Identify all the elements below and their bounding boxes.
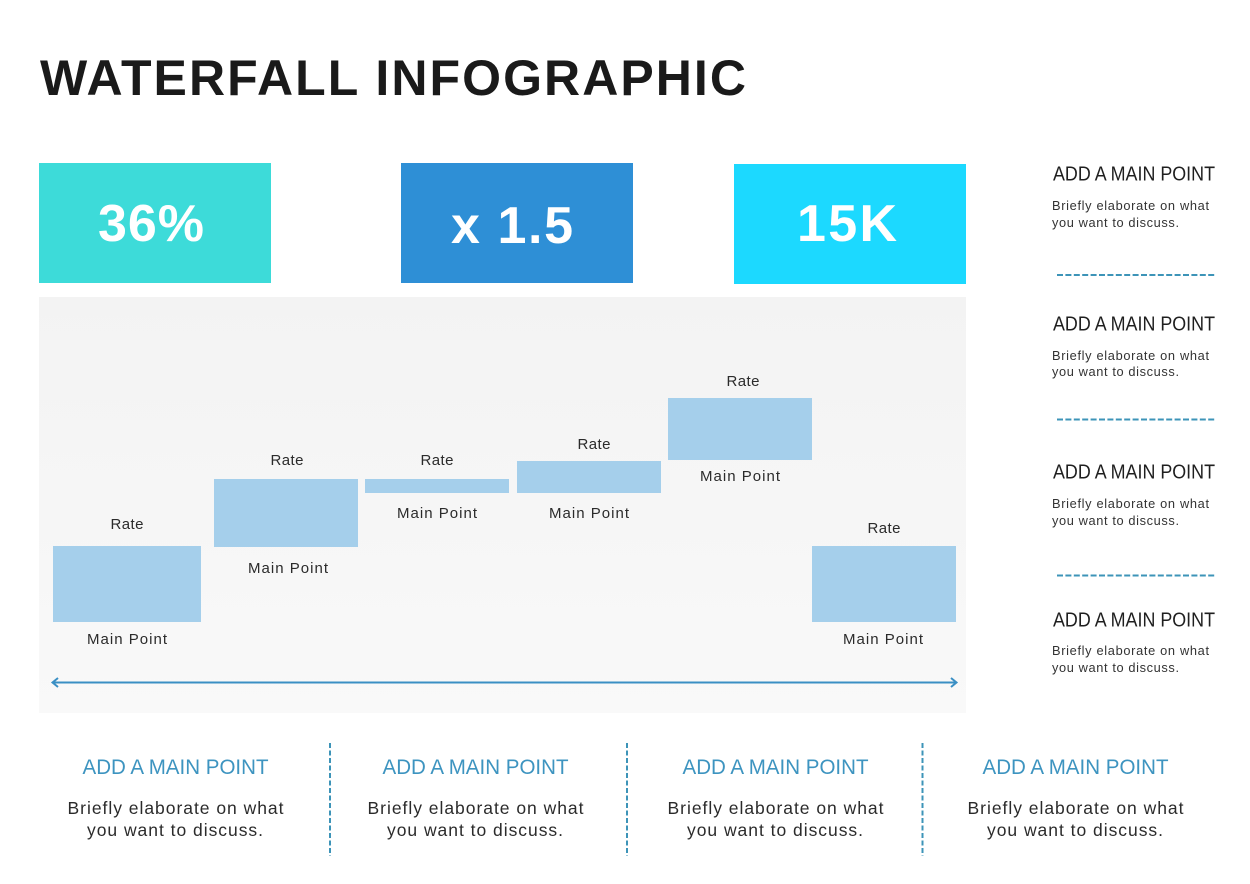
bottom column 4: you want to discuss. [987,820,1163,840]
bar 2: Rate [270,452,304,469]
bar 4: Main Point [549,505,630,522]
bar 1 [53,516,201,648]
bottom column 1: Briefly elaborate on what [68,798,284,818]
panel: waterfall chart [39,297,966,713]
bar 6: Rate [868,520,900,537]
side note 3: ADD A MAIN POINT [1053,462,1215,484]
bar 3: Main Point [397,505,478,522]
side note 4: Briefly elaborate on what [1052,643,1209,658]
bottom column 4: Briefly elaborate on what [968,798,1184,818]
side note 3 [1052,462,1215,528]
bottom column 1: ADD A MAIN POINT [82,756,269,779]
bottom column 3 [668,756,884,840]
side note 1: Briefly elaborate on what [1052,198,1209,213]
side note 2 [1052,314,1215,379]
side note 2: you want to discuss. [1052,364,1179,379]
stat card: x 1.5: x 1.5 [451,197,573,255]
bar 6: Main Point [843,631,924,648]
stat card: 15K [734,164,966,284]
bottom column 3: you want to discuss. [687,820,863,840]
side note 1 [1052,164,1215,230]
bottom column 4 [968,756,1184,840]
bottom column 3: ADD A MAIN POINT [682,756,869,779]
bar 5: Main Point [700,468,781,485]
side note 1: ADD A MAIN POINT [1053,164,1215,186]
side note 3: Briefly elaborate on what [1052,496,1209,511]
bottom column 1: you want to discuss. [87,820,263,840]
bottom column 4: ADD A MAIN POINT [982,756,1169,779]
bar 3: Rate [420,452,454,469]
bar 1: Main Point [87,631,168,648]
side note 1: you want to discuss. [1052,215,1179,230]
title: WATERFALL INFOGRAPHIC [40,50,746,106]
bottom column 2: Briefly elaborate on what [368,798,584,818]
side note 2: ADD A MAIN POINT [1053,314,1215,336]
bar 2 [214,452,358,577]
stat card: 36% [39,163,271,283]
bar 6 [812,520,956,648]
stat card: 36%: 36% [98,195,204,253]
bottom column 2: you want to discuss. [387,820,563,840]
bar 1: Rate [110,516,144,533]
side note 4: ADD A MAIN POINT [1053,610,1215,632]
bar 4: Rate [578,436,610,453]
bar 3 [365,452,509,522]
bottom column 2: ADD A MAIN POINT [382,756,569,779]
bottom column 2 [368,756,584,840]
bar 2: Main Point [248,560,329,577]
side note 4 [1052,610,1215,675]
side note 4: you want to discuss. [1052,660,1179,675]
stat card: 15K: 15K [797,195,897,253]
bar 5 [668,373,812,485]
stat card: x 1.5 [401,163,633,283]
arrow: double-headed axis [52,678,956,687]
bottom column 1 [68,756,284,840]
side note 3: you want to discuss. [1052,513,1179,528]
side note 2: Briefly elaborate on what [1052,348,1209,363]
bar 4 [517,436,661,522]
bottom column 3: Briefly elaborate on what [668,798,884,818]
bar 5: Rate [726,373,760,390]
